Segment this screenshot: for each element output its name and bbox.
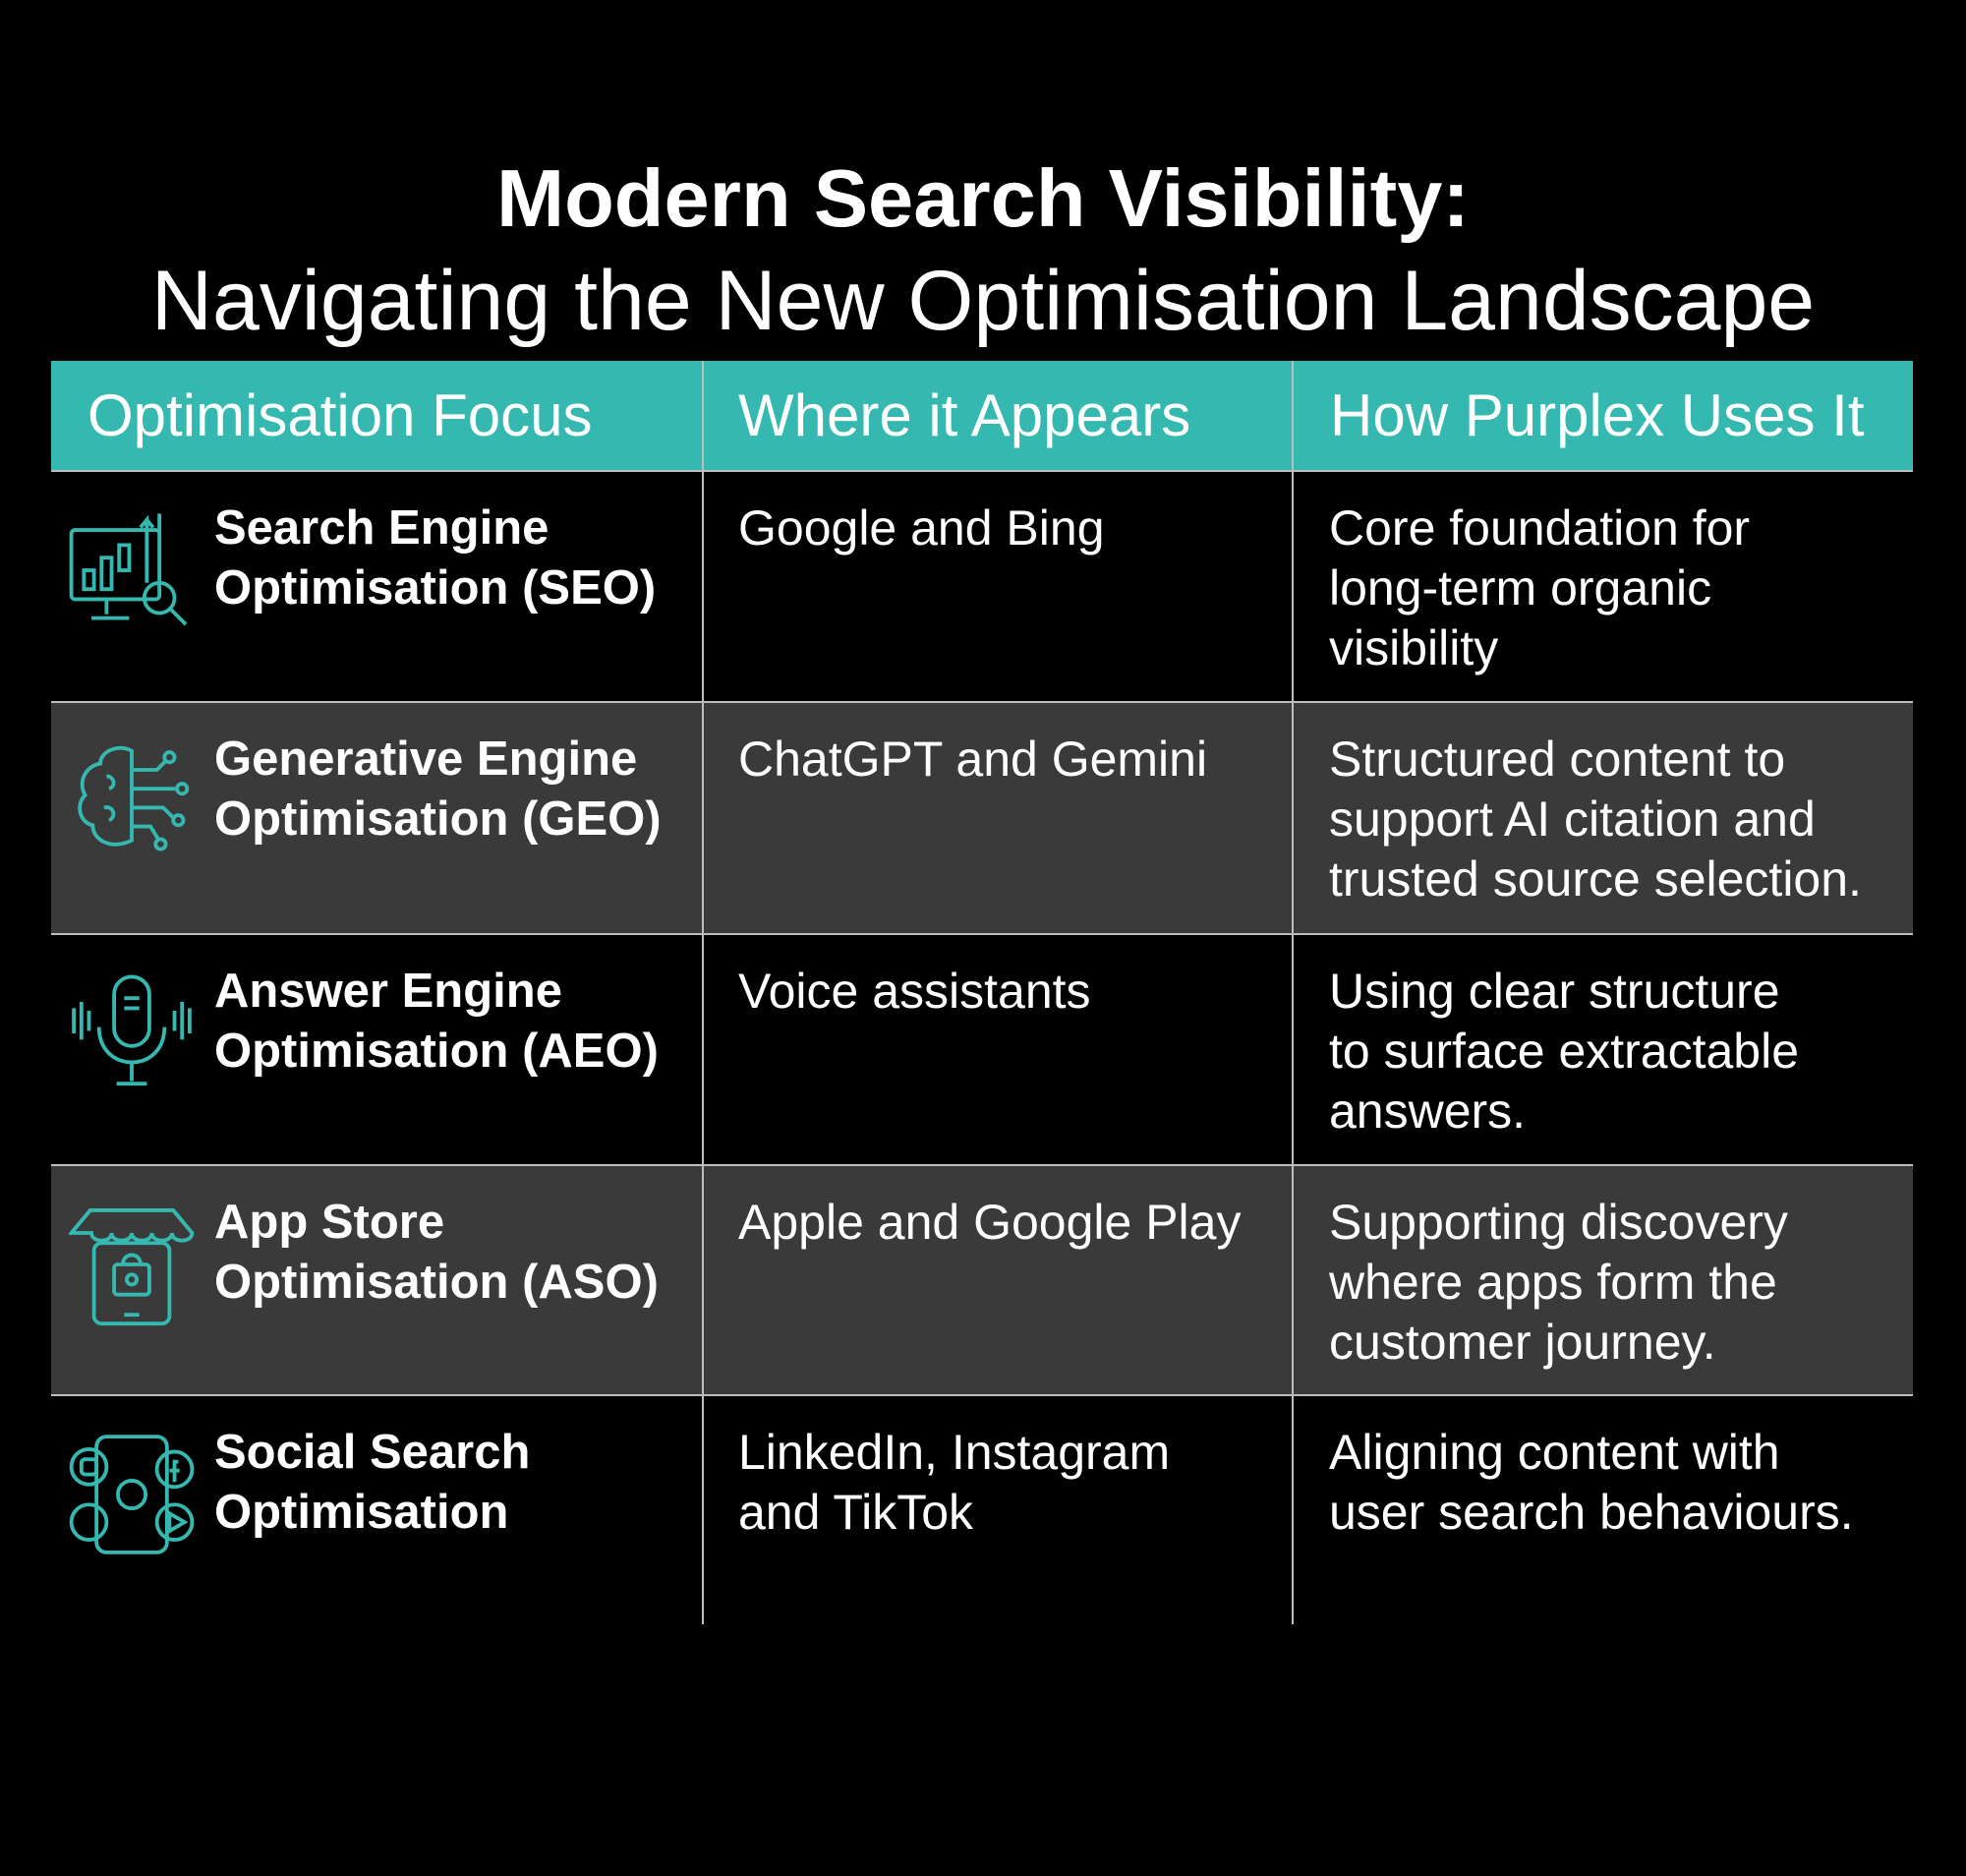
icon: app store xyxy=(69,1208,195,1325)
row: AEO xyxy=(51,933,1913,1164)
row: SEO: Optimisation (SEO) xyxy=(214,561,656,615)
row: SEO: Search Engine xyxy=(214,501,549,555)
row: ASO: customer journey. xyxy=(1329,1315,1716,1370)
row: AEO: answers. xyxy=(1329,1084,1526,1139)
icon: analytics monitor xyxy=(69,513,187,625)
row: ASO: Optimisation (ASO) xyxy=(214,1256,659,1309)
row: SEO: long-term organic xyxy=(1329,560,1711,616)
row: GEO: ChatGPT and Gemini xyxy=(738,732,1207,787)
row: AEO: to surface extractable xyxy=(1329,1024,1799,1079)
row: SEO: Google and Bing xyxy=(738,500,1105,556)
row: ASO: App Store xyxy=(214,1196,444,1249)
table header: How Purplex Uses It xyxy=(1330,382,1865,448)
row: GEO xyxy=(51,701,1913,933)
row: ASO: where apps form the xyxy=(1329,1255,1777,1310)
row: Social: Aligning content with xyxy=(1329,1425,1780,1480)
row: Social: user search behaviours. xyxy=(1329,1485,1854,1540)
row: SEO xyxy=(51,470,1913,701)
table header xyxy=(51,361,1913,470)
table header: Optimisation Focus xyxy=(87,382,593,448)
row: AEO: Answer Engine xyxy=(214,965,562,1018)
row: AEO: Voice assistants xyxy=(738,964,1091,1019)
icon: AI brain xyxy=(78,745,189,851)
row: AEO: Using clear structure xyxy=(1329,964,1779,1019)
icon: social phone xyxy=(69,1435,195,1554)
row: ASO: Supporting discovery xyxy=(1329,1195,1788,1250)
row: Social: Social Search xyxy=(214,1426,530,1479)
row: Social xyxy=(51,1394,1913,1624)
row: Social: and TikTok xyxy=(738,1485,973,1540)
row: GEO: Optimisation (GEO) xyxy=(214,792,662,846)
row: Social: Optimisation xyxy=(214,1486,508,1539)
row: GEO: trusted source selection. xyxy=(1329,851,1862,907)
row: GEO: Structured content to xyxy=(1329,732,1785,787)
row: GEO: support AI citation and xyxy=(1329,791,1816,847)
title: Navigating the New Optimisation Landscape xyxy=(151,254,1815,348)
table header: Where it Appears xyxy=(738,382,1190,448)
row: ASO: Apple and Google Play xyxy=(738,1195,1241,1250)
row: GEO: Generative Engine xyxy=(214,733,637,786)
row: Social: LinkedIn, Instagram xyxy=(738,1425,1170,1480)
icon: microphone xyxy=(72,975,192,1085)
title: Modern Search Visibility: xyxy=(496,152,1470,244)
title xyxy=(151,152,1815,348)
row: SEO: visibility xyxy=(1329,620,1498,675)
row: AEO: Optimisation (AEO) xyxy=(214,1025,659,1078)
row: SEO: Core foundation for xyxy=(1329,500,1750,556)
row: ASO xyxy=(51,1164,1913,1394)
